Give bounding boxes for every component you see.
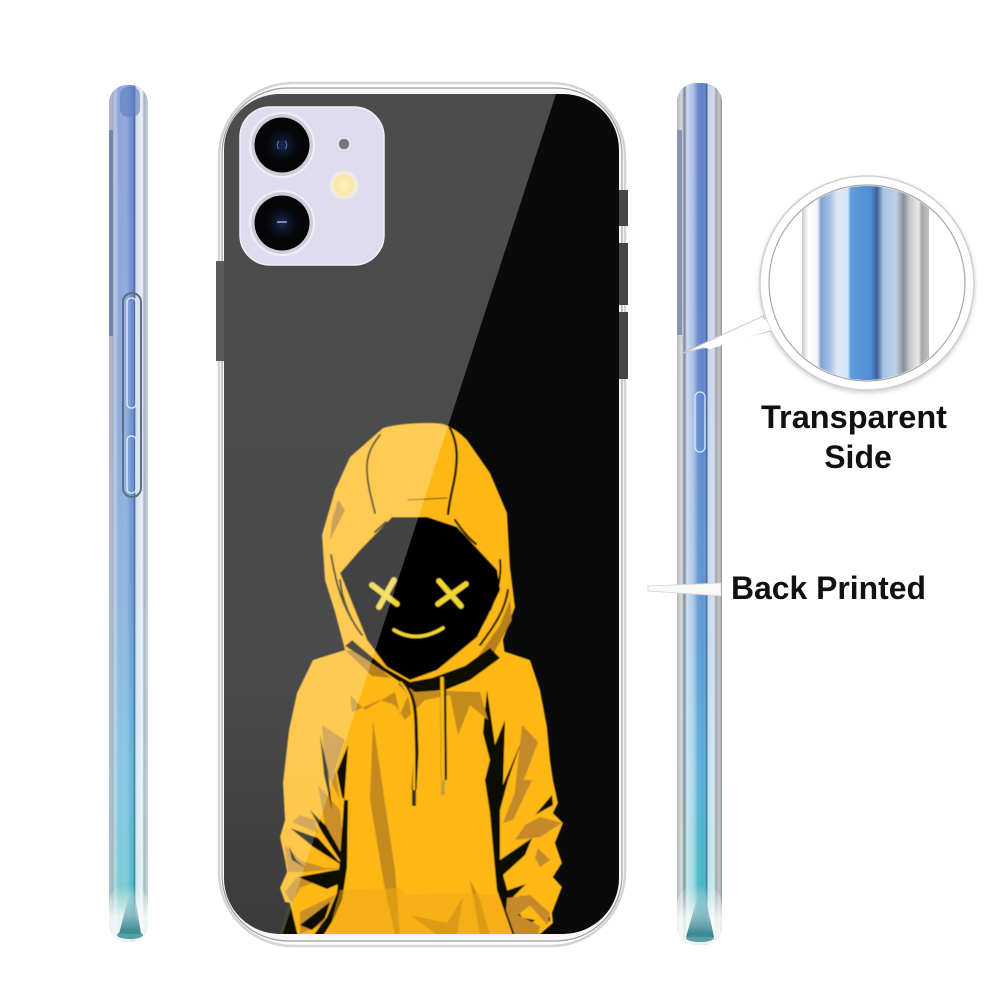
- hoodie drawstrings: [400, 677, 444, 806]
- glossy glare overlay: [224, 94, 556, 937]
- magnifier ring: [760, 176, 974, 390]
- callout bar: back printed: [648, 583, 721, 596]
- magnifier ring shadow: [759, 177, 975, 393]
- left sleeve tan shade: [285, 725, 345, 934]
- printed black back: [224, 94, 619, 934]
- magnifier callout: transparent side: [683, 176, 975, 393]
- hood fold lines: [331, 428, 508, 645]
- top lens: [250, 113, 314, 177]
- hoodie artwork: [280, 423, 563, 936]
- label: Back Printed: Back Printed: [731, 570, 926, 606]
- side button left: [216, 261, 225, 361]
- torso shade: [350, 690, 490, 935]
- flash: [329, 170, 359, 200]
- side button outline: [695, 392, 705, 452]
- side buttons right: [618, 190, 628, 379]
- face: cross eyes and smile: [372, 580, 466, 637]
- phone side view: left edge: [109, 85, 148, 942]
- right sleeve black folds: [483, 690, 553, 936]
- callout pointer: [683, 316, 770, 353]
- right sleeve tan shade: [503, 725, 562, 936]
- bottom lens: [250, 191, 314, 255]
- face void: [340, 517, 500, 680]
- camera module: [240, 107, 384, 265]
- clear case outer frame: [219, 83, 625, 946]
- neck collar dark: [345, 640, 500, 692]
- hoodie body: [280, 650, 563, 936]
- side buttons outline: [123, 293, 141, 497]
- hood: [321, 422, 516, 652]
- label: Transparent Side: [761, 399, 947, 475]
- torso lower band: [330, 888, 490, 934]
- phone side view: right edge: [677, 83, 722, 945]
- label: Transparent Side: Transparent: [761, 399, 947, 435]
- phone back view with printed case: [216, 83, 628, 946]
- label: Transparent Side: Side: [824, 439, 892, 475]
- magnified stripes: [802, 180, 929, 386]
- hood shading: [330, 500, 512, 678]
- left sleeve black folds: [280, 735, 348, 936]
- microphone dot: [338, 138, 350, 150]
